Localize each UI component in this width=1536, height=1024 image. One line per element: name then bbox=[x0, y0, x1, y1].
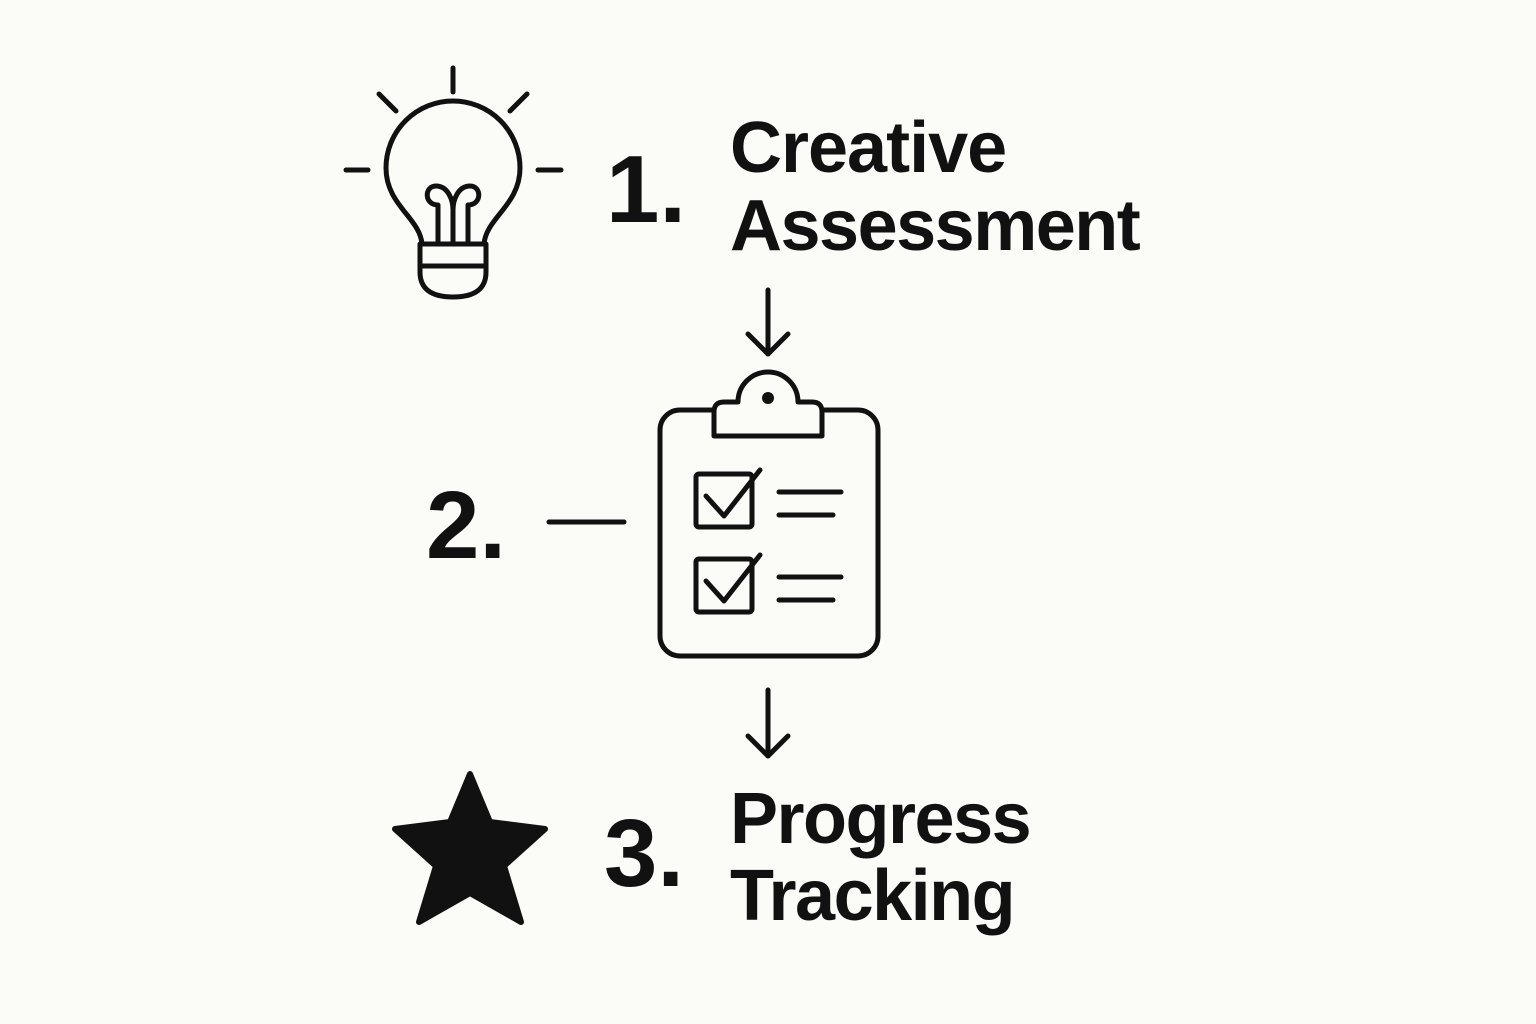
connector dash bbox=[549, 520, 624, 524]
step 3 number: 3. bbox=[604, 800, 684, 907]
step 3 label: Progress bbox=[730, 779, 1030, 859]
icon: star bbox=[395, 774, 545, 922]
step 1 label: Creative bbox=[730, 108, 1006, 188]
step 1 label: Assessment bbox=[730, 186, 1141, 266]
arrow: step 2 to 3 bbox=[748, 690, 788, 756]
step 2 number: 2. bbox=[426, 472, 506, 579]
step 3 label: Tracking bbox=[730, 856, 1014, 936]
step 1 number: 1. bbox=[606, 136, 686, 243]
icon: lightbulb bbox=[346, 68, 561, 297]
arrow: step 1 to 2 bbox=[748, 290, 788, 354]
icon: clipboard checklist bbox=[660, 372, 878, 656]
